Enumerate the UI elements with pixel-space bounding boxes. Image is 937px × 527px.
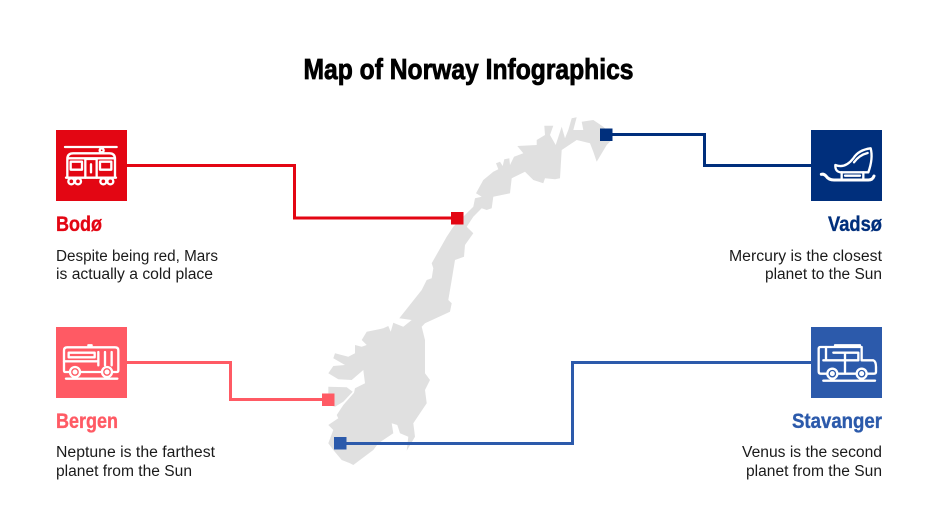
heading: Vadsø: Vadsø: [828, 213, 882, 236]
text: Stavanger description: planet from the Sun: [746, 463, 882, 480]
panel: Stavanger: [742, 327, 882, 480]
marker: Vadsø: [600, 128, 612, 141]
icon: bus: [56, 327, 127, 398]
map of Norway: [328, 117, 612, 465]
panel: Bergen: [56, 327, 216, 480]
heading: Stavanger: Stavanger: [792, 410, 882, 433]
heading: Bergen: Bergen: [56, 410, 118, 433]
connector: Vadsø: [605, 134, 811, 166]
icon: sled: [811, 130, 882, 201]
text: Bodø description: is actually a cold place: [56, 266, 213, 283]
connector: Bergen: [126, 362, 328, 400]
text: Vadsø description: Mercury is the closest: [729, 248, 883, 265]
text: Vadsø description: planet to the Sun: [765, 266, 882, 283]
marker: Stavanger: [334, 437, 346, 450]
panel: Vadsø: [729, 130, 883, 283]
marker: Bodø: [451, 212, 464, 224]
panel: Bodø: [56, 130, 218, 283]
text: Stavanger description: Venus is the second: [742, 444, 882, 461]
connector: Stavanger: [340, 362, 811, 444]
connector: Bodø: [126, 166, 457, 218]
icon: tram: [56, 130, 127, 201]
text: Bergen description: planet from the Sun: [56, 463, 192, 480]
text: Bodø description: Despite being red, Mars: [56, 248, 218, 265]
title: Map of Norway Infographics: [304, 54, 634, 86]
marker: Bergen: [322, 394, 334, 406]
icon: jeep: [811, 327, 882, 398]
text: Bergen description: Neptune is the farthest: [56, 444, 216, 461]
heading: Bodø: Bodø: [56, 213, 102, 236]
